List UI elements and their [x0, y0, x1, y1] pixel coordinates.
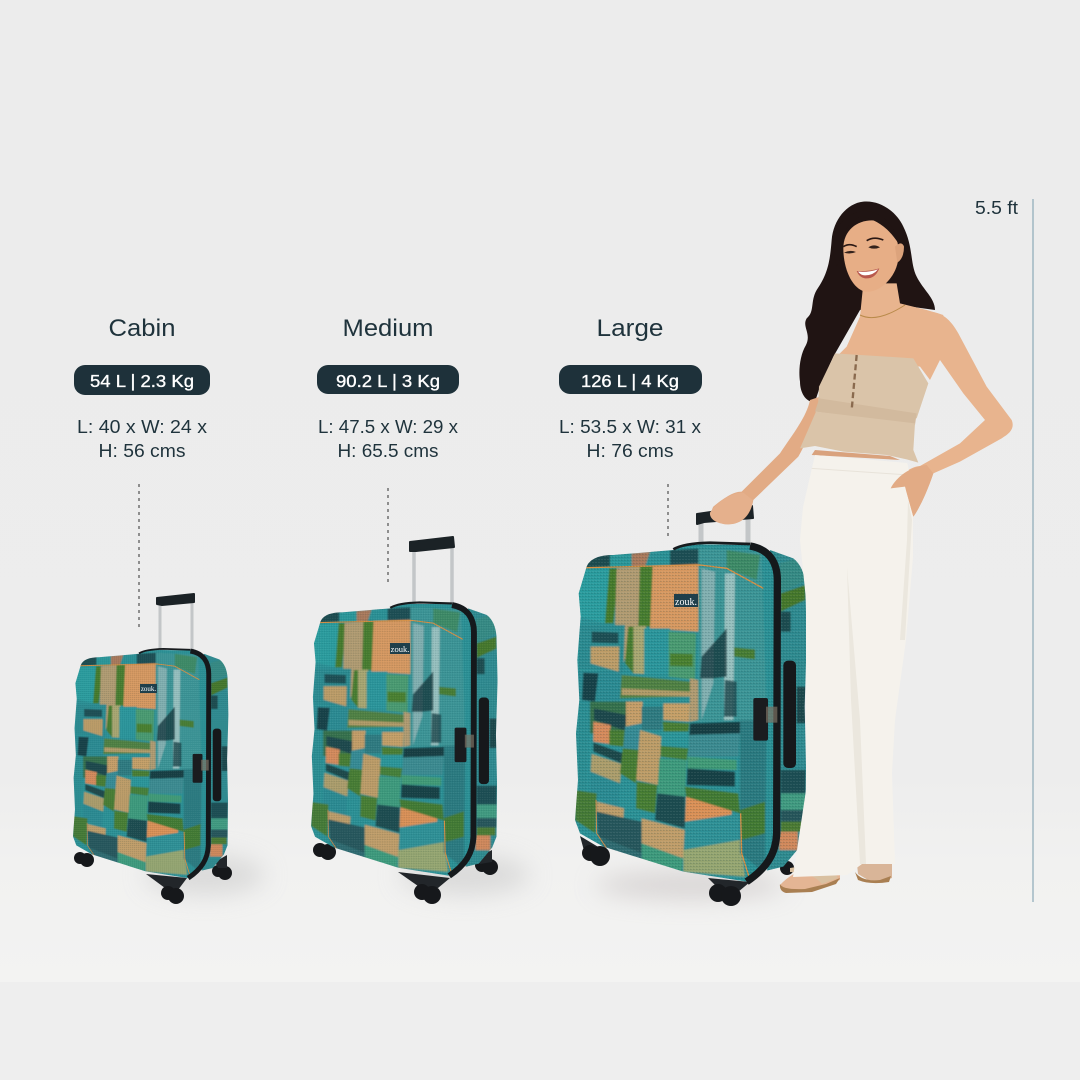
suitcase: Cabin	[70, 594, 232, 904]
dimensions: Medium	[318, 416, 459, 461]
strapless top	[818, 353, 928, 418]
suitcase: Large	[570, 506, 810, 906]
wide-leg white trousers	[793, 455, 913, 877]
waistband	[812, 455, 913, 490]
column: Large	[559, 315, 702, 461]
suitcase: Medium: zouk.	[391, 644, 409, 654]
suitcase: Cabin: zouk.	[141, 685, 156, 693]
neck and chest	[837, 283, 943, 380]
dimensions: Medium: H: 65.5 cms	[338, 440, 438, 461]
dimensions: Large: H: 76 cms	[586, 440, 674, 461]
badge: Medium capacity and weight: 90.2 L | 3 Kg	[336, 371, 440, 391]
column: Medium	[317, 315, 459, 461]
floor shadows	[145, 855, 785, 899]
sandals and feet	[780, 862, 892, 893]
dimensions: Cabin	[77, 416, 208, 461]
near arm with hand in pocket	[891, 311, 1013, 517]
face	[843, 220, 899, 292]
arm: far arm reaching to handle	[712, 397, 820, 524]
column: Cabin	[74, 315, 210, 461]
dimensions: Medium: L: 47.5 x W: 29 x	[318, 416, 459, 437]
dimensions: Cabin: H: 56 cms	[98, 440, 186, 461]
dashed leader: Cabin	[138, 484, 140, 627]
height scale line	[1032, 199, 1034, 902]
badge: Medium capacity and weight	[317, 365, 459, 394]
dashed leader: Large	[667, 484, 669, 537]
badge: Large capacity and weight	[559, 365, 702, 394]
badge: Large capacity and weight: 126 L | 4 Kg	[581, 371, 679, 391]
badge: Cabin capacity and weight: 54 L | 2.3 Kg	[90, 371, 194, 391]
hand on suitcase handle	[710, 493, 753, 524]
heading: Large: Large	[596, 315, 664, 342]
hand over pocket	[891, 465, 933, 517]
dashed leader: Medium	[387, 488, 389, 582]
dimensions: Large: L: 53.5 x W: 31 x	[559, 416, 702, 437]
heading: Cabin: Cabin	[108, 315, 176, 342]
dimensions: Cabin: L: 40 x W: 24 x	[77, 416, 208, 437]
dimensions: Large	[559, 416, 702, 461]
heading: Medium: Medium	[342, 315, 434, 342]
suitcase: Large: zouk.	[675, 597, 697, 608]
badge: Cabin capacity and weight	[74, 365, 210, 395]
waist gap	[812, 450, 900, 460]
model: woman standing beside the large suitcase	[710, 202, 1013, 893]
hair back	[710, 202, 1013, 524]
suitcase: Medium	[307, 537, 500, 904]
height label: 5.5 ft	[975, 197, 1018, 218]
